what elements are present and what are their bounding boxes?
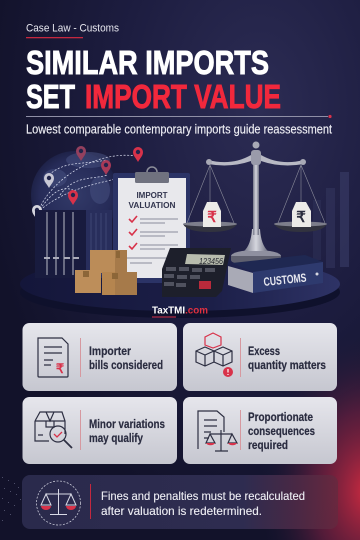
icon: scale in dashed circle: [36, 481, 80, 525]
title: [26, 45, 281, 116]
scale with rupee tags: [183, 142, 327, 266]
card: minor variations: [22, 397, 177, 464]
card: importer bills: bills considered: [89, 358, 163, 372]
scale with rupee tags: ₹: [296, 209, 306, 226]
card: proportionate consequences: Proportionate: [248, 410, 313, 424]
card: excess quantity: Excess: [248, 344, 280, 358]
customs book: [228, 255, 323, 293]
title: SIMILAR IMPORTS: [26, 45, 269, 82]
icon: bill with rupee: ₹: [56, 361, 65, 376]
dotted pattern: [2, 477, 21, 521]
clipboard: import valuation: VALUATION: [128, 201, 176, 210]
globe with route pins: [31, 146, 143, 239]
title: SET: [26, 79, 75, 116]
subtitle: [26, 115, 332, 136]
icon: document with scale: [198, 411, 237, 451]
clipboard: import valuation: IMPORT: [136, 191, 168, 200]
card: importer bills: [22, 323, 177, 391]
bar chart backdrop: [313, 172, 349, 268]
icon: bill with rupee: [38, 338, 68, 377]
card: excess quantity: quantity matters: [248, 358, 326, 372]
card: proportionate consequences: [183, 397, 337, 464]
icon: stacked boxes with alert: [196, 333, 233, 377]
callout: fines and penalties: [22, 475, 338, 529]
card: proportionate consequences: consequences: [248, 424, 315, 438]
title: IMPORT VALUE: [85, 79, 281, 116]
card: excess quantity: [183, 323, 337, 391]
shipping container: [35, 210, 112, 278]
logo: TaxTMI.com: TaxTMI.com: [152, 304, 208, 316]
cardboard boxes: [75, 250, 137, 295]
eyebrow: Case Law - Customs: Case Law - Customs: [26, 22, 119, 34]
clipboard: import valuation: [113, 167, 190, 283]
card: proportionate consequences: required: [248, 438, 288, 452]
callout: fines and penalties: after valuation is redetermined.: [101, 504, 262, 518]
card: minor variations: Minor variations: [89, 417, 165, 431]
card: minor variations: may qualify: [89, 431, 143, 445]
icon: box with magnifier: [35, 412, 72, 448]
calculator: 123456: [199, 256, 223, 266]
callout: fines and penalties: Fines and penalties must be recalculated: [101, 489, 305, 503]
calculator: [162, 248, 231, 297]
card: importer bills: Importer: [89, 344, 131, 358]
platform: [20, 257, 340, 318]
scale with rupee tags: ₹: [207, 209, 217, 226]
customs book: CUSTOMS: [263, 271, 307, 289]
